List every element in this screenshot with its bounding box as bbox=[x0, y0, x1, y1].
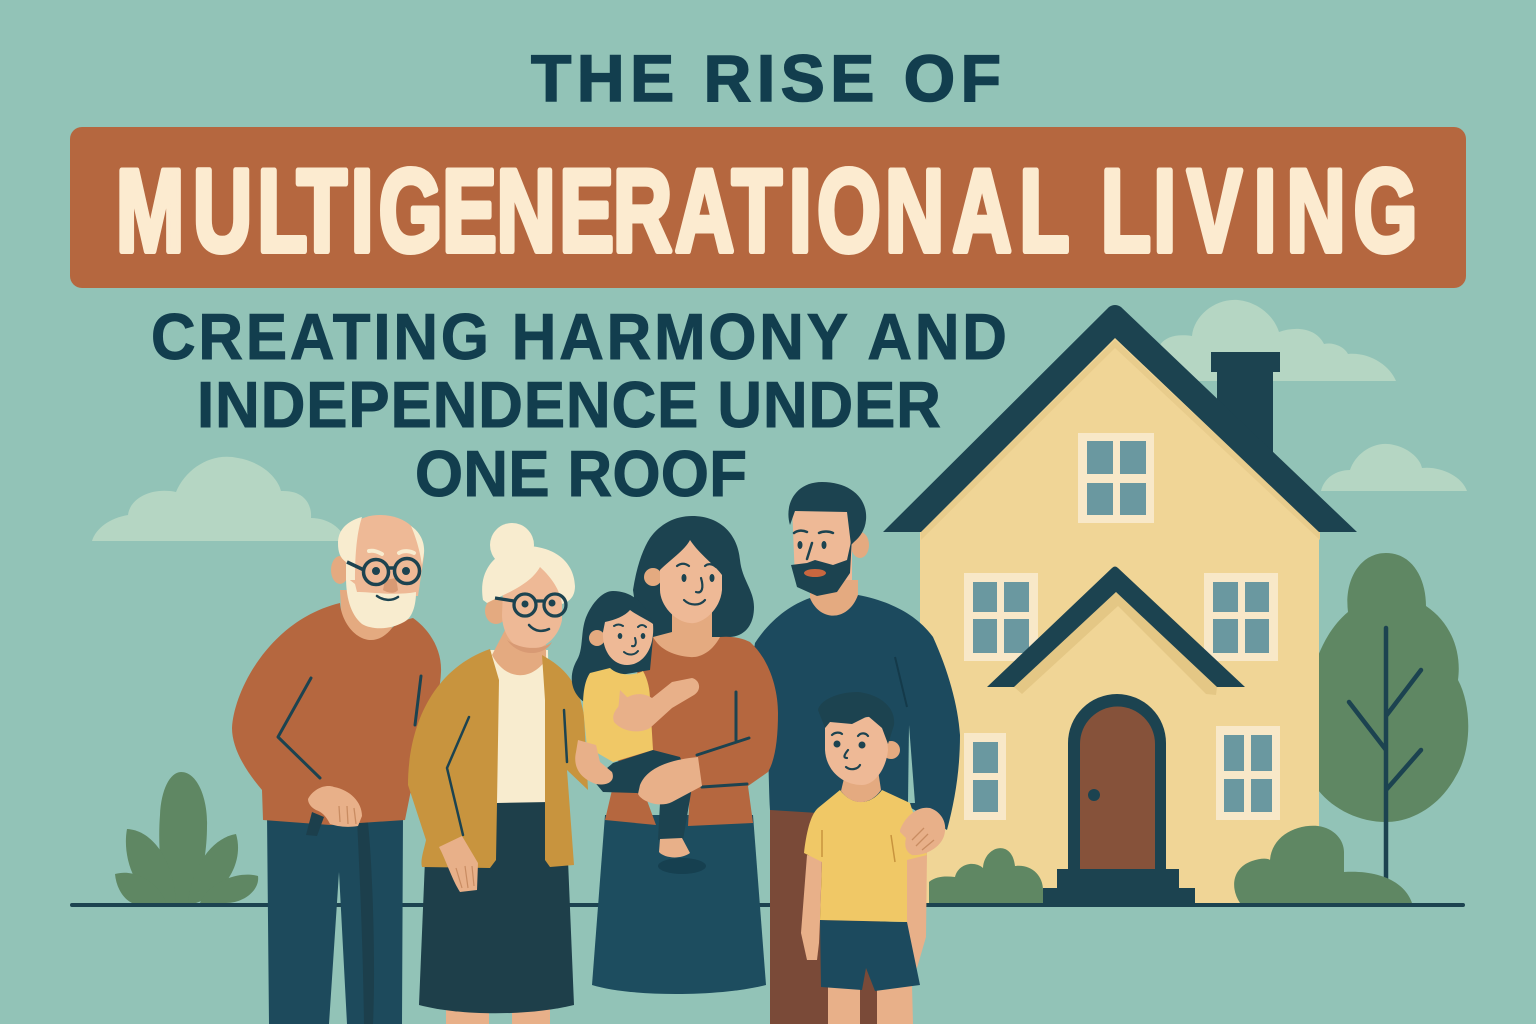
shirt creases bbox=[822, 830, 895, 862]
neck bbox=[810, 580, 858, 616]
foot bbox=[659, 838, 690, 857]
person: boy bbox=[801, 692, 945, 1024]
hair bbox=[818, 692, 894, 744]
neck bbox=[653, 610, 720, 657]
house bbox=[883, 305, 1412, 904]
smile bbox=[377, 596, 398, 600]
eyebrows bbox=[369, 551, 414, 554]
window: upper right bbox=[1204, 573, 1278, 661]
sweater crease bbox=[895, 657, 907, 707]
white shirt bbox=[488, 650, 550, 803]
legs bbox=[593, 750, 692, 840]
porch gable bbox=[987, 566, 1245, 695]
ear bbox=[331, 556, 349, 584]
person: mother bbox=[592, 516, 778, 994]
cardigan left bbox=[408, 649, 499, 868]
hair bbox=[482, 546, 575, 604]
house wall bbox=[920, 335, 1319, 903]
person: father bbox=[753, 482, 960, 1024]
cardigan right bbox=[542, 655, 588, 867]
title banner bbox=[70, 127, 1466, 288]
head bbox=[344, 515, 424, 596]
skirt bbox=[592, 815, 766, 994]
nose bbox=[383, 578, 398, 593]
person: grandfather bbox=[232, 515, 441, 1024]
white hair bbox=[338, 517, 424, 580]
bush: far left bbox=[115, 772, 258, 903]
foot shadow bbox=[658, 858, 706, 874]
sweater bbox=[232, 603, 441, 825]
bush: left of door bbox=[929, 848, 1043, 903]
beard bbox=[791, 537, 852, 596]
chin shadow bbox=[507, 640, 552, 653]
cloud: upper right bbox=[1160, 300, 1396, 381]
yellow shirt bbox=[583, 668, 653, 762]
subtitle bbox=[151, 302, 1007, 510]
face bbox=[825, 715, 888, 785]
cane bbox=[357, 815, 374, 1024]
sweater bbox=[753, 595, 960, 830]
left arm bbox=[801, 855, 822, 960]
ear bbox=[485, 598, 507, 624]
cardigan creases bbox=[447, 710, 567, 835]
person: grandmother bbox=[408, 523, 588, 1024]
main roof bbox=[921, 340, 1320, 540]
shirt bbox=[804, 790, 927, 922]
mother's right hand bbox=[638, 757, 702, 804]
face bbox=[603, 610, 653, 665]
cloud: small right bbox=[1321, 444, 1467, 491]
hand bbox=[439, 836, 478, 892]
steps bbox=[1043, 869, 1195, 904]
sweater bbox=[605, 637, 778, 826]
window: upper left bbox=[964, 573, 1038, 661]
subtitle: INDEPENDENCE UNDER bbox=[197, 370, 941, 441]
bun bbox=[490, 523, 534, 567]
smile bbox=[529, 625, 549, 631]
eyes and brows bbox=[677, 564, 716, 604]
title: the rise of: THE RISE OF bbox=[531, 41, 1001, 115]
sleeve lines bbox=[697, 692, 749, 787]
glasses bbox=[495, 594, 566, 616]
ear bbox=[851, 532, 869, 558]
ear bbox=[644, 568, 662, 586]
thumb bbox=[618, 690, 630, 714]
person: child held by mother bbox=[572, 591, 706, 874]
hand bbox=[308, 786, 362, 827]
face bbox=[660, 540, 722, 623]
window: top centre bbox=[1078, 433, 1154, 523]
cane handle bbox=[306, 812, 324, 836]
skirt bbox=[419, 798, 574, 1013]
glasses bbox=[347, 558, 420, 584]
right arm bbox=[893, 852, 927, 968]
title: multigenerational living: MULTIGENERATIONAL LIVING bbox=[116, 147, 1417, 276]
features bbox=[614, 624, 646, 655]
mother's left hand bbox=[575, 740, 613, 784]
gap between arm and body bbox=[908, 725, 915, 803]
ground line bbox=[70, 903, 1465, 907]
arm bbox=[613, 678, 699, 731]
mouth bbox=[804, 569, 826, 577]
eyes and brows bbox=[794, 531, 833, 559]
trousers bbox=[770, 805, 880, 1024]
legs bbox=[828, 985, 913, 1024]
window: lower right bbox=[1216, 726, 1280, 820]
face bbox=[502, 562, 562, 650]
legs bbox=[446, 1005, 550, 1024]
neck bbox=[340, 590, 392, 645]
father's hand on shoulder bbox=[900, 808, 945, 855]
neck bbox=[492, 630, 546, 675]
cloud: left bbox=[92, 457, 346, 541]
ear bbox=[882, 741, 900, 759]
face bbox=[792, 505, 852, 580]
sweater creases bbox=[278, 676, 421, 778]
hair back bbox=[633, 516, 754, 650]
chimney bbox=[1211, 352, 1280, 470]
beard bbox=[346, 577, 416, 628]
trousers bbox=[267, 815, 403, 1024]
subtitle: ONE ROOF bbox=[415, 439, 747, 510]
hair bbox=[572, 591, 654, 702]
subtitle: CREATING HARMONY AND bbox=[151, 302, 1007, 373]
features bbox=[832, 733, 868, 769]
ear bbox=[589, 630, 605, 646]
window: lower left bbox=[964, 733, 1006, 820]
bush: right of door bbox=[1234, 826, 1412, 903]
tree bbox=[1318, 553, 1468, 882]
hair bbox=[788, 482, 866, 545]
shorts bbox=[820, 920, 920, 991]
door bbox=[1068, 694, 1166, 872]
neck bbox=[841, 770, 881, 802]
